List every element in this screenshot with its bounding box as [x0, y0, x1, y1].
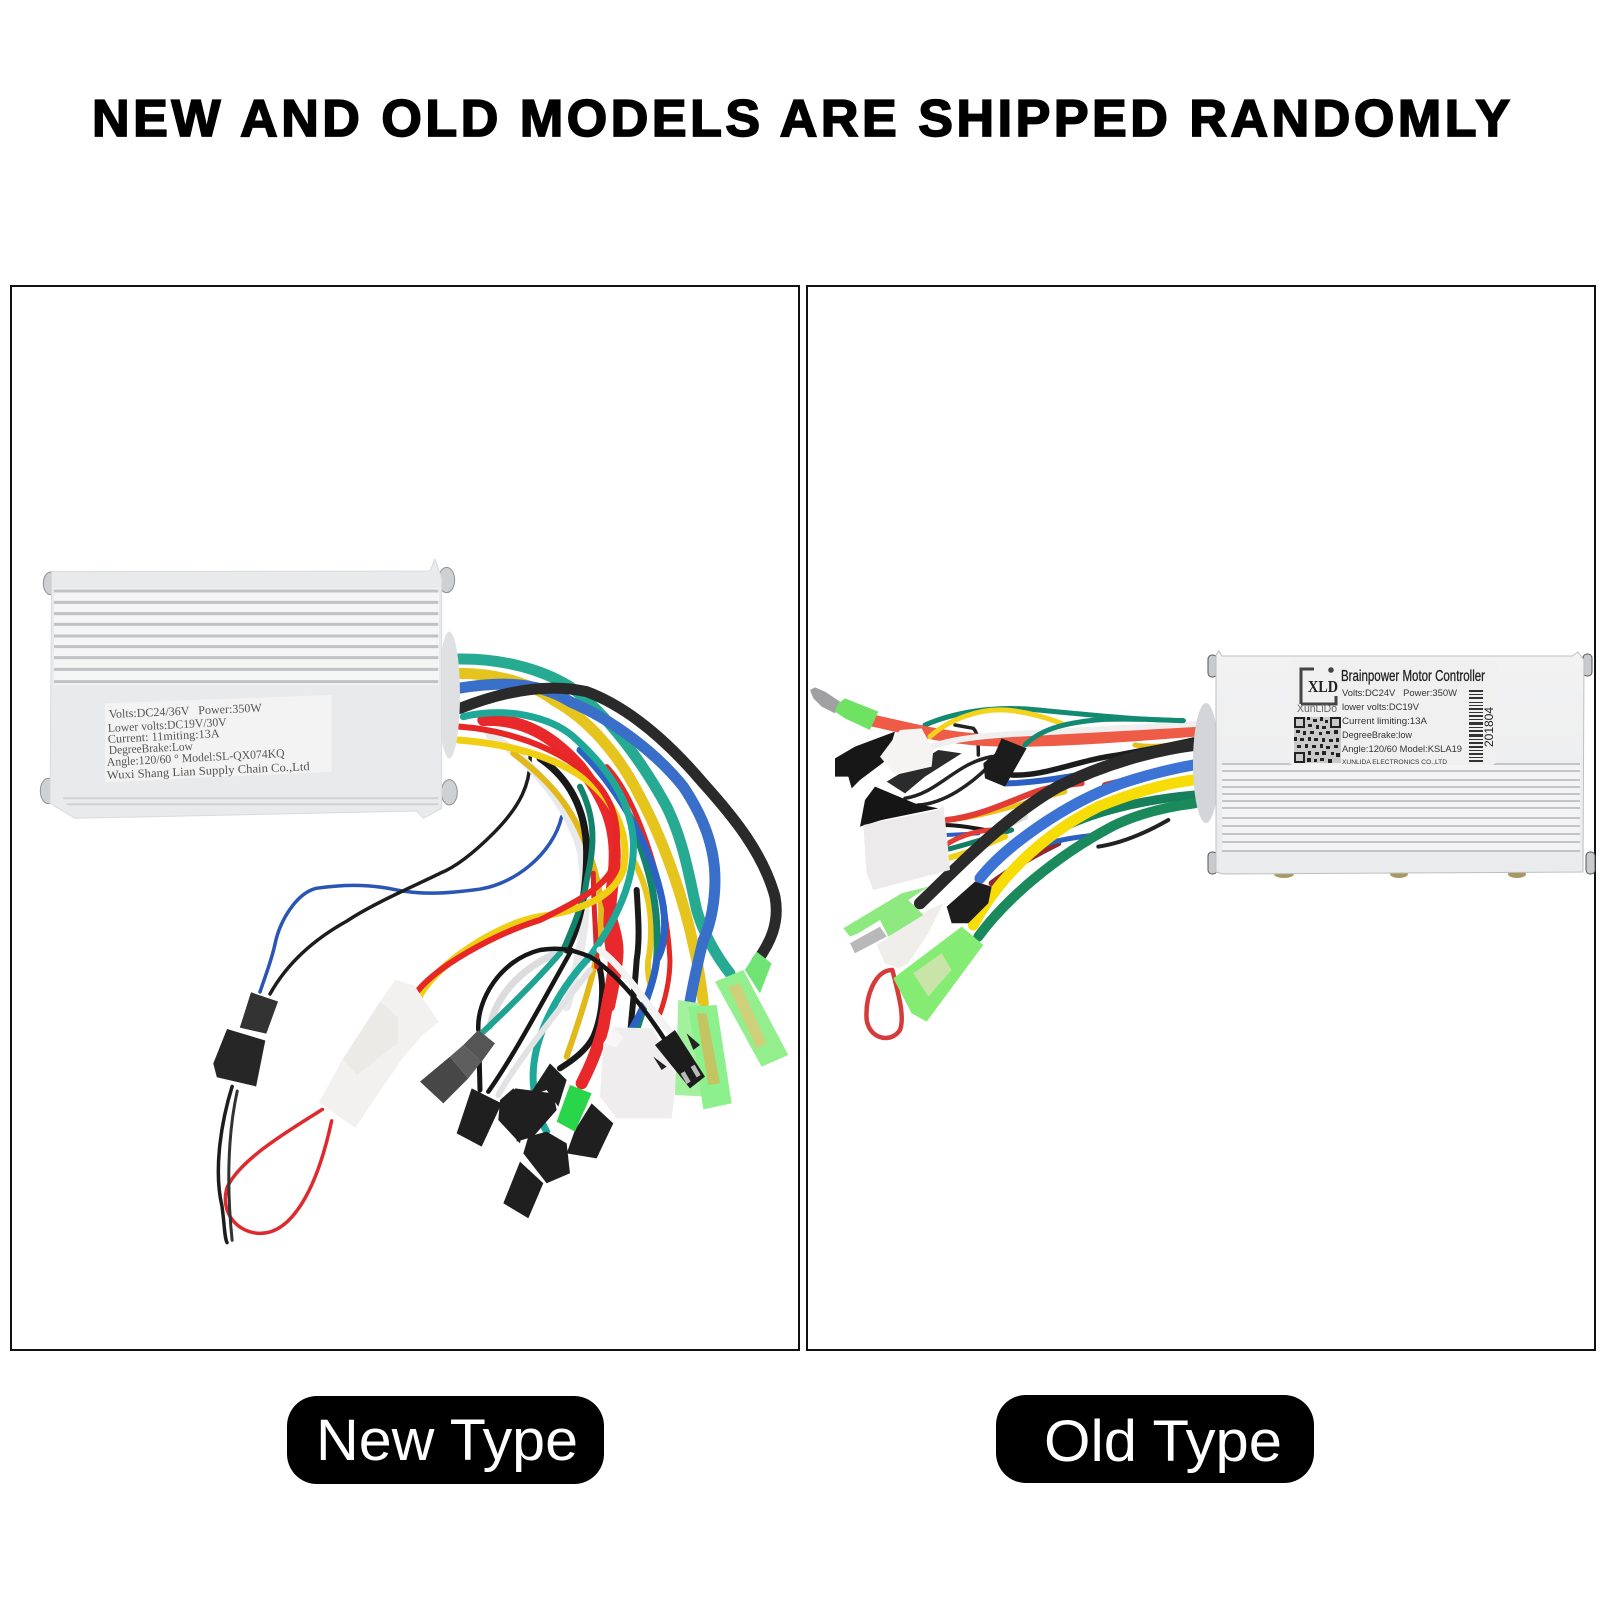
panel: new type frame — [11, 286, 799, 1350]
spec text: Lower volts:DC19V/30V — [107, 715, 227, 735]
rubber grommet — [1193, 703, 1219, 823]
black connector, lower — [860, 787, 938, 827]
badge: new type: New Type — [316, 1408, 578, 1473]
small connectors and terminals — [420, 952, 788, 1218]
thin wires to small connectors — [478, 949, 675, 1095]
spec text: Wuxi Shang Lian Supply Chain Co.,Ltd — [107, 759, 310, 782]
aluminium controller case: old type — [1193, 651, 1595, 878]
green sleeve on red wire — [557, 1085, 592, 1132]
sticker specifications: Volts:DC24V Power:350W — [1342, 688, 1457, 699]
spec text: Angle:120/60 ° Model:SL-QX074KQ — [106, 746, 285, 769]
black connector, top left — [835, 732, 895, 788]
mounting screws — [1208, 654, 1595, 874]
gray connector — [420, 1030, 495, 1103]
spec text — [106, 701, 310, 782]
black connectors cluster — [457, 1063, 613, 1218]
badge: old type: Old Type — [1044, 1409, 1282, 1474]
black connector, right — [983, 738, 1027, 787]
black connector, center low — [947, 882, 992, 923]
product sticker — [1288, 660, 1497, 766]
sticker specifications: Current limiting:13A — [1342, 716, 1428, 727]
heat-sink fins — [1222, 764, 1580, 851]
aluminium controller case: new type — [40, 559, 460, 818]
black connector, behind — [887, 750, 962, 793]
sticker specifications: Angle:120/60 Model:KSLA19 — [1342, 744, 1462, 755]
white spade — [877, 903, 943, 968]
spec sticker — [105, 695, 332, 782]
spec text: Volts:DC24/36V Power:350W — [109, 701, 263, 721]
mounting screws — [40, 567, 457, 805]
title: NEW AND OLD MODELS ARE SHIPPED RANDOMLY — [92, 90, 1510, 148]
bottom bolts — [1274, 870, 1526, 878]
sticker specifications: XUNLIDA ELECTRONICS CO.,LTD — [1342, 759, 1447, 766]
new type motor controller — [40, 559, 788, 1243]
barcode — [1469, 690, 1483, 762]
red loop and black wires — [218, 1086, 332, 1243]
case body — [1216, 651, 1584, 874]
white six-way block — [600, 1027, 677, 1118]
white two-way connector — [319, 980, 439, 1128]
wire harness: old type — [866, 709, 1195, 1038]
XLD logo: XunLiDo — [1297, 703, 1337, 715]
sticker specifications: lower volts:DC19V — [1342, 702, 1420, 713]
heat-sink fins — [54, 591, 438, 804]
black connector at block — [653, 1030, 705, 1088]
sticker heading: Brainpower Motor Controller — [1341, 668, 1485, 685]
white multi-way block — [863, 805, 950, 890]
bullet terminal, top — [810, 687, 878, 730]
panel: old type frame — [807, 286, 1595, 1350]
white connector, top — [880, 728, 933, 775]
wire harness: new type — [260, 659, 776, 1132]
QR code — [1294, 717, 1341, 763]
badge: old type — [996, 1395, 1314, 1483]
old type motor controller — [810, 651, 1595, 1038]
rubber grommet — [439, 632, 460, 758]
green terminals — [675, 952, 788, 1109]
green spade terminal — [893, 927, 983, 1022]
case body — [50, 559, 442, 818]
serial number: 201804 — [1482, 707, 1496, 747]
lower bullet and green sleeve — [843, 887, 928, 953]
sticker specifications: DegreeBrake:low — [1342, 730, 1412, 741]
black connector pair — [213, 992, 278, 1086]
sticker specifications — [1342, 688, 1462, 766]
fin band — [54, 588, 439, 685]
fin band — [1222, 764, 1580, 852]
XLD logo — [1297, 667, 1338, 715]
XLD logo: XLD — [1308, 677, 1338, 696]
badge: new type — [287, 1396, 604, 1484]
spec text: Current: 11miting:13A — [107, 726, 220, 746]
connectors and terminals: old type — [810, 687, 1027, 1022]
spec text: DegreeBrake:Low — [108, 739, 193, 757]
